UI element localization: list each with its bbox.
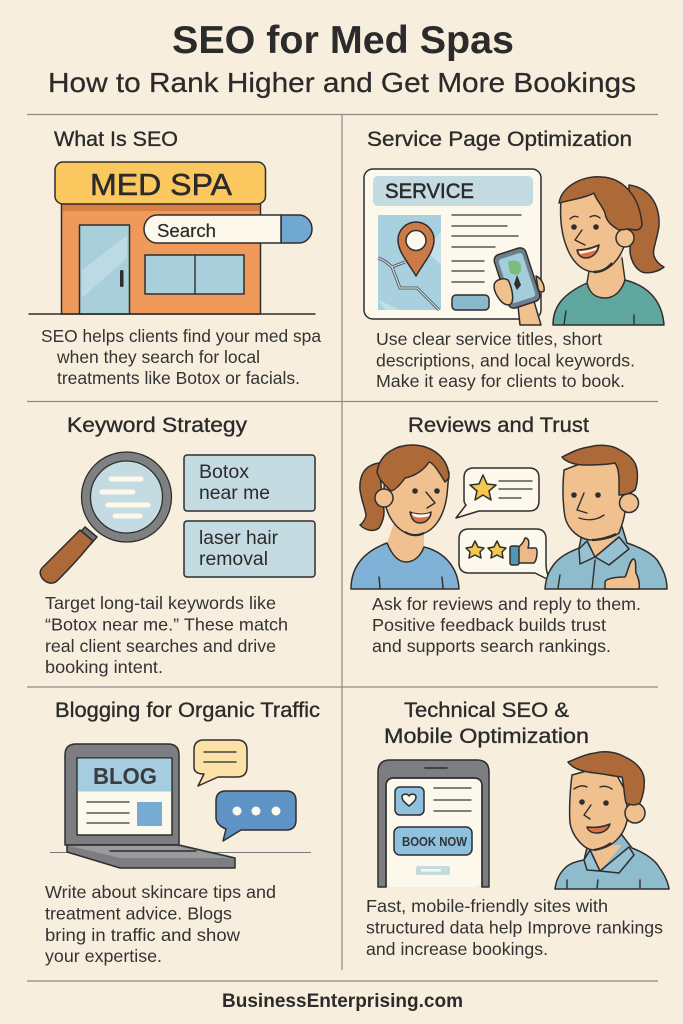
heading: Keyword Strategy: Keyword Strategy <box>67 413 247 437</box>
text block: Keyword Strategy: real client searches and drive <box>45 636 276 656</box>
heading: Blogging for Organic Traffic: Blogging for Organic Traffic <box>55 698 320 722</box>
text block: Technical SEO <box>366 896 663 959</box>
text block: What Is SEO: SEO helps clients find your med spa <box>41 326 321 346</box>
icon: laptop showing blog <box>50 744 311 868</box>
text block: Technical SEO: Fast, mobile-friendly sites with <box>366 896 608 916</box>
icon: smiling woman <box>351 445 459 589</box>
text block: Keyword Strategy: booking intent. <box>45 657 163 677</box>
keyword box: laser hair removal <box>184 521 315 577</box>
icon: smiling man <box>555 752 669 889</box>
text block: Reviews and Trust: Ask for reviews and reply to them. <box>372 594 641 614</box>
footer: BusinessEnterprising.com <box>222 991 463 1012</box>
icon: med spa storefront with search bar: Search <box>157 221 216 241</box>
keyword box: Botox near me: near me <box>199 483 270 504</box>
panel: Service Page Optimization <box>364 127 664 391</box>
text block: Blogging: bring in traffic and show <box>45 925 240 945</box>
heading: Reviews and Trust: Reviews and Trust <box>408 413 589 437</box>
heading: Technical SEO and Mobile Optimization: Mobile Optimization <box>384 724 589 748</box>
text block: Keyword Strategy: Target long-tail keywords like <box>45 593 276 613</box>
panel: Reviews and Trust <box>351 413 667 656</box>
text block: Reviews and Trust: and supports search rankings. <box>372 636 611 656</box>
text block: Keyword Strategy <box>45 593 288 677</box>
heading: Technical SEO and Mobile Optimization <box>384 698 589 748</box>
text block: Service Page Optimization: Make it easy for clients to book. <box>376 371 625 391</box>
text block: Service Page Optimization: Use clear service titles, short <box>376 329 602 349</box>
speech bubble: blue dots <box>216 791 296 841</box>
icon: phone with book now button <box>378 760 489 887</box>
icon: service web page with map: SERVICE <box>385 180 474 203</box>
heading: Service Page Optimization: Service Page Optimization <box>367 127 632 151</box>
heading: What Is SEO: What Is SEO <box>54 127 178 151</box>
title <box>48 19 636 98</box>
text block: Keyword Strategy: “Botox near me.” These match <box>45 614 288 634</box>
keyword box: Botox near me: Botox <box>199 462 250 483</box>
title: How to Rank Higher and Get More Bookings <box>48 67 636 98</box>
text block: Blogging: treatment advice. Blogs <box>45 904 232 924</box>
icon: phone with book now button: BOOK NOW <box>402 835 467 849</box>
text block: Blogging: your expertise. <box>45 946 162 966</box>
panel: Keyword Strategy <box>40 413 315 677</box>
panel: Technical SEO and Mobile Optimization <box>366 698 669 959</box>
text block: Blogging <box>45 882 276 966</box>
panel: Blogging for Organic Traffic <box>45 698 320 966</box>
text block: What Is SEO: treatments like Botox or facials. <box>57 368 300 388</box>
text block: Reviews and Trust: Positive feedback builds trust <box>372 615 606 635</box>
text block: What Is SEO: when they search for local <box>56 347 260 367</box>
text block: Technical SEO: structured data help Improve rankings <box>366 918 663 938</box>
speech bubble: yellow note <box>194 740 247 786</box>
speech bubble: star review <box>456 468 539 518</box>
icon: laptop showing blog: BLOG <box>93 763 157 789</box>
icon: man giving thumbs up <box>545 445 667 589</box>
title: SEO for Med Spas <box>172 19 514 62</box>
text block: Technical SEO: and increase bookings. <box>366 939 548 959</box>
text block: Service Page Optimization <box>376 329 635 391</box>
heading: Technical SEO and Mobile Optimization: Technical SEO & <box>404 698 569 722</box>
keyword box: laser hair removal: removal <box>199 549 268 570</box>
text block: What Is SEO <box>41 326 321 388</box>
icon: service web page with map <box>364 169 541 319</box>
icon: med spa storefront with search bar <box>29 162 315 314</box>
speech bubble: stars and thumbs up <box>459 529 553 582</box>
text block: Blogging: Write about skincare tips and <box>45 882 276 902</box>
keyword box: Botox near me <box>184 455 315 511</box>
text block: Reviews and Trust <box>372 594 641 656</box>
icon: woman holding phone <box>493 177 664 325</box>
keyword box: laser hair removal: laser hair <box>199 528 279 549</box>
icon: magnifying glass <box>40 452 171 583</box>
panel: What Is SEO <box>29 127 321 388</box>
icon: med spa storefront with search bar: MED SPA <box>90 168 233 202</box>
text block: Service Page Optimization: descriptions, and local keywords. <box>376 350 635 370</box>
